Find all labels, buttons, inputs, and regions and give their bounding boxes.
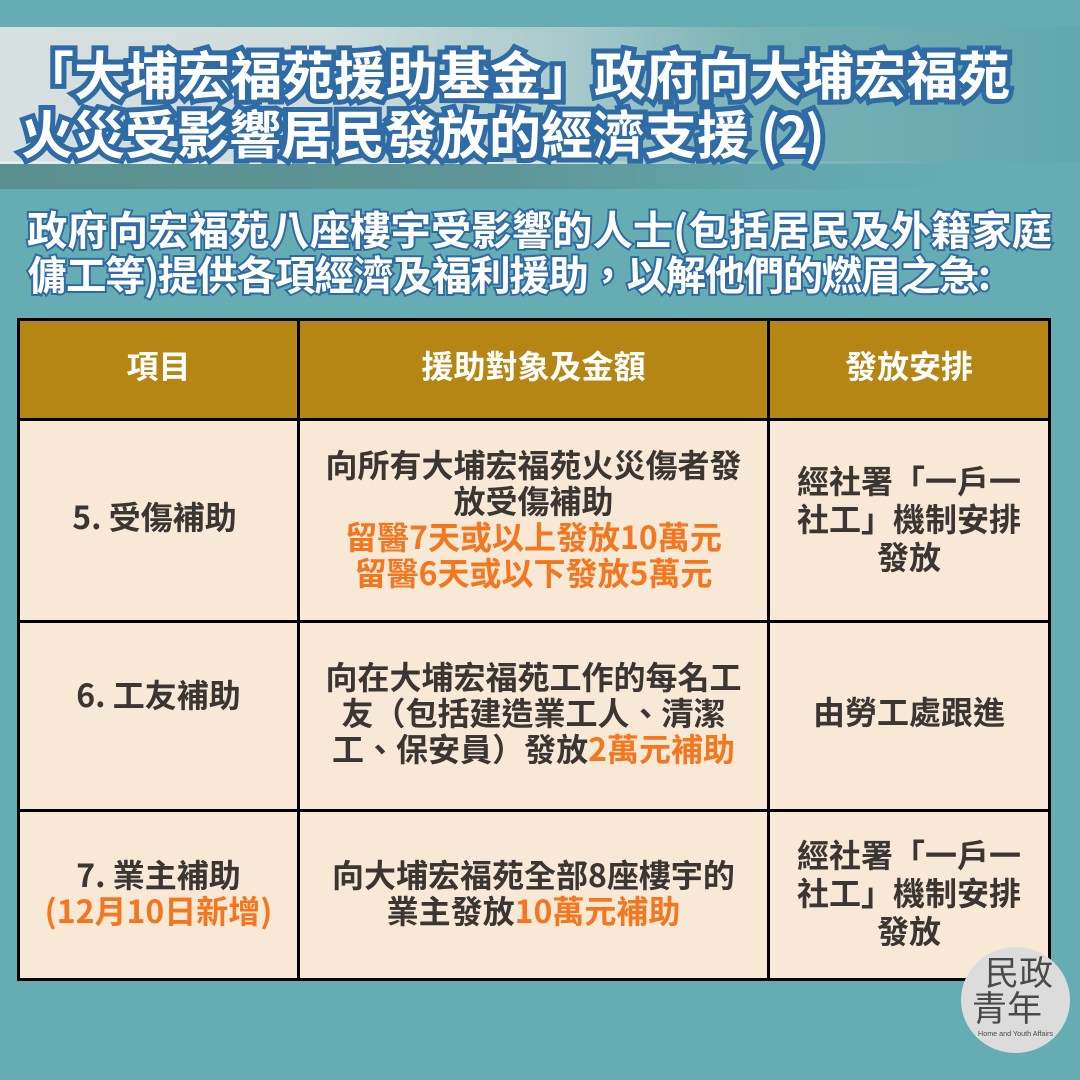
header: recipients and amount — [300, 321, 767, 418]
logo: Home and Youth Affairs badge: 民政 — [985, 947, 1053, 995]
subtitle: 傭工等)提供各項經濟及福利援助，以解他們的燃眉之急: — [27, 243, 990, 302]
title banner — [0, 27, 933, 189]
title — [13, 35, 1014, 171]
row 7 arrangement: 社工」機制安排 — [797, 868, 1021, 914]
logo: Home and Youth Affairs badge: Home and Youth Affairs — [978, 1029, 1053, 1038]
row 6 amount: 向在大埔宏福苑工作的每名工 — [325, 652, 742, 698]
row 7 amount: 向大埔宏福苑全部8座樓宇的 — [332, 850, 735, 896]
row 6 amount — [300, 623, 767, 809]
row 7 arrangement — [770, 812, 1048, 978]
header: item: 項目 — [126, 342, 190, 388]
row 5 amount: 留醫7天或以上發放10萬元 — [345, 513, 722, 559]
row 5 item: 5. 受傷補助 — [72, 493, 237, 539]
row 6 amount: 友（包括建造業工人、清潔 — [341, 688, 726, 734]
logo: Home and Youth Affairs badge — [961, 947, 1070, 1053]
header: recipients and amount: 援助對象及金額 — [421, 342, 646, 388]
row 7 arrangement: 經社署「一戶一 — [797, 830, 1021, 876]
row 7 item — [20, 812, 297, 978]
subtitle — [26, 198, 1055, 302]
row 5 arrangement: 經社署「一戶一 — [797, 457, 1021, 503]
table — [17, 318, 1051, 981]
row 5 item — [20, 421, 297, 620]
row 5 arrangement: 發放 — [877, 533, 941, 579]
row 6 item — [20, 623, 297, 809]
title: 火災受影響居民發放的經濟支援 (2) — [21, 94, 822, 169]
header: item — [20, 321, 297, 418]
row 5 amount: 放受傷補助 — [453, 477, 614, 523]
row 7 amount — [300, 812, 767, 978]
row 7 amount: 業主發放10萬元補助 — [387, 886, 680, 932]
row 5 amount: 留醫6天或以下發放5萬元 — [355, 549, 712, 595]
subtitle: 政府向宏福苑八座樓宇受影響的人士(包括居民及外籍家庭 — [27, 198, 1052, 257]
row 6 amount: 工、保安員）發放2萬元補助 — [332, 724, 735, 770]
row 5 arrangement: 社工」機制安排 — [797, 495, 1021, 541]
row 6 arrangement — [770, 623, 1048, 809]
row 5 amount: 向所有大埔宏福苑火災傷者發 — [325, 441, 742, 487]
title: 「大埔宏福苑援助基金」政府向大埔宏福苑 — [22, 35, 1010, 110]
logo: Home and Youth Affairs badge: 青年 — [972, 981, 1042, 1032]
row 5 amount — [300, 421, 767, 620]
row 7 item: (12月10日新增) — [45, 886, 272, 932]
row 7 arrangement: 發放 — [877, 906, 941, 952]
row 7 item: 7. 業主補助 — [76, 850, 241, 896]
header: arrangement: 發放安排 — [845, 342, 973, 388]
row 6 arrangement: 由勞工處跟進 — [813, 688, 1005, 734]
header: arrangement — [770, 321, 1048, 418]
row 6 item: 6. 工友補助 — [76, 670, 241, 716]
row 5 arrangement — [770, 421, 1048, 620]
